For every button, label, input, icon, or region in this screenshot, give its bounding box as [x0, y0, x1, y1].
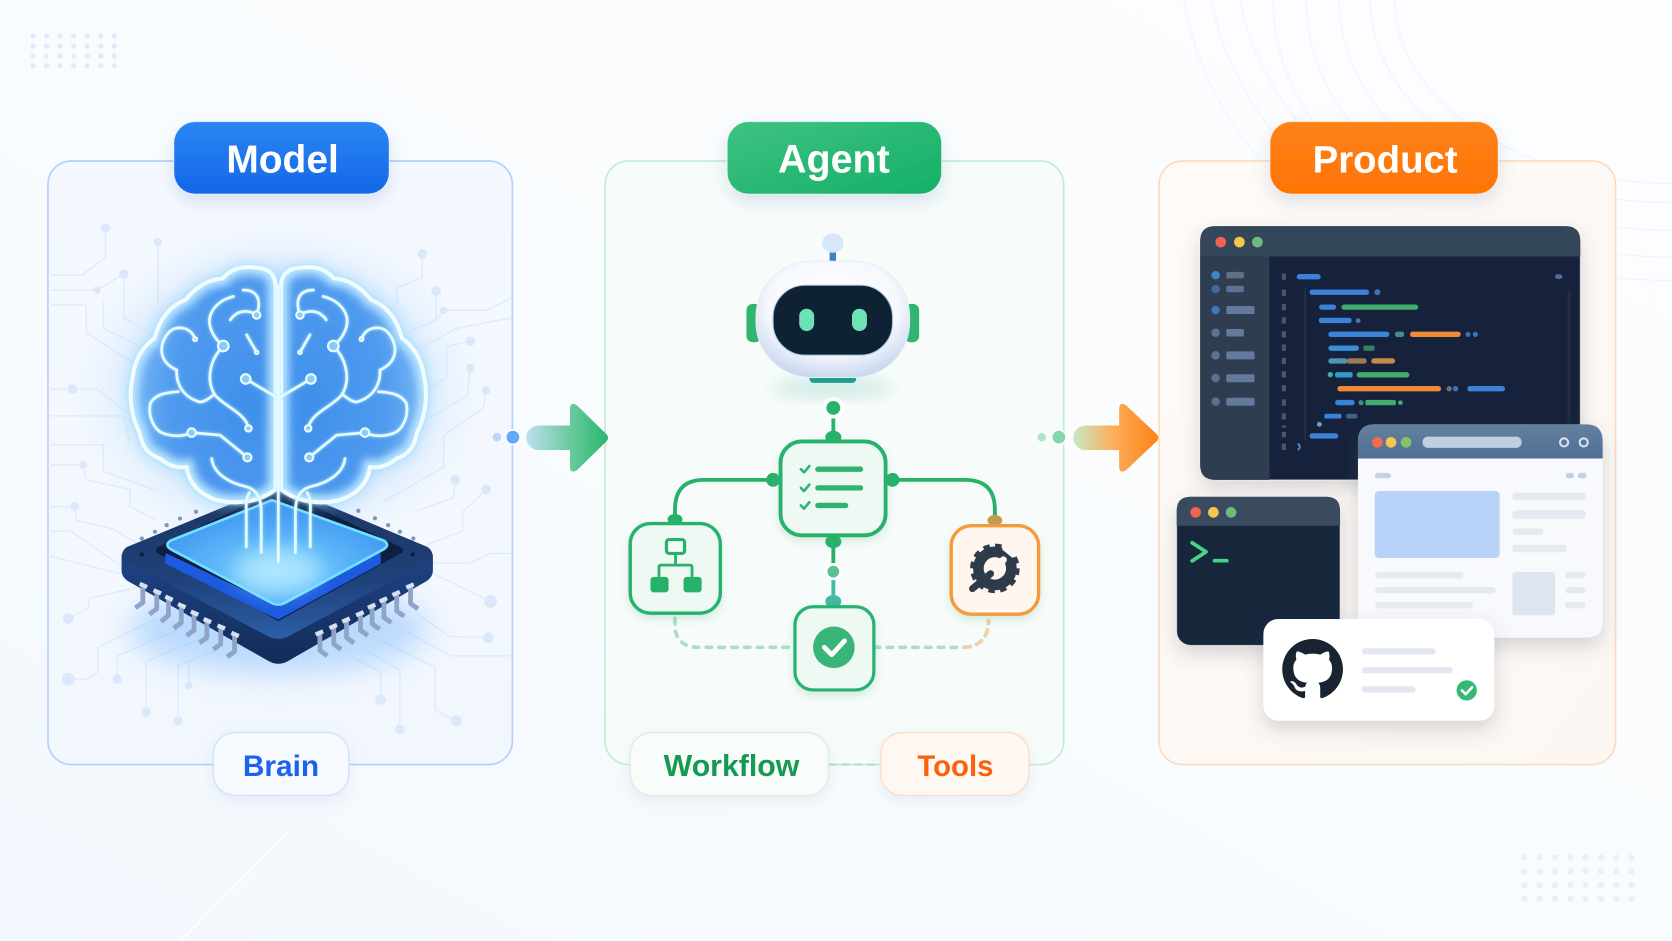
label: agent: Agent	[778, 138, 890, 182]
sidebar items	[1211, 271, 1255, 406]
arrow: model to agent	[493, 404, 608, 472]
chip body	[122, 555, 433, 664]
browser window	[1358, 424, 1603, 638]
label: product	[1270, 122, 1498, 194]
circuit traces background	[48, 228, 512, 729]
terminal window	[1177, 497, 1340, 645]
label: model: Model	[226, 139, 339, 182]
label: tools	[881, 733, 1029, 795]
panel: agent	[605, 161, 1064, 765]
glowing pad	[167, 500, 387, 605]
label: brain	[213, 733, 349, 795]
arrow: agent to product	[1038, 404, 1158, 472]
label: workflow	[630, 733, 829, 795]
code editor window	[1200, 226, 1580, 480]
label: brain: Brain	[243, 750, 319, 783]
background arcs	[1184, 0, 1672, 280]
panel: model	[48, 161, 512, 765]
node: checklist	[781, 441, 886, 535]
label: model	[174, 122, 389, 194]
panel: product	[1159, 161, 1615, 765]
label: tools: Tools	[917, 750, 993, 783]
brain nodes	[187, 311, 369, 461]
glow behind brain and chip	[70, 219, 486, 674]
icon: github	[1282, 639, 1343, 698]
chip pins front	[135, 584, 418, 657]
icon: microchip	[122, 487, 433, 664]
node: workflow hierarchy	[630, 524, 720, 613]
icon: verified check	[1457, 680, 1477, 700]
github card	[1263, 619, 1494, 721]
node: check	[795, 607, 874, 690]
brain folds	[150, 286, 407, 562]
workflow connectors	[675, 397, 995, 765]
decorative dot grid bottom right	[1521, 854, 1635, 902]
brain outline	[131, 267, 426, 502]
label: product: Product	[1313, 139, 1458, 182]
chip pins back	[140, 509, 415, 541]
icon: brain	[131, 267, 426, 562]
label: agent	[727, 122, 942, 194]
code line numbers	[1282, 274, 1286, 450]
brain inner edge glow	[131, 267, 276, 502]
connector bumps	[668, 431, 1002, 608]
decorative dot grid top left	[30, 34, 117, 68]
chip well	[159, 493, 400, 617]
icon: robot head	[746, 234, 919, 396]
node: tools gear	[951, 526, 1039, 614]
label: workflow: Workflow	[664, 750, 800, 783]
code bars	[1297, 274, 1562, 450]
